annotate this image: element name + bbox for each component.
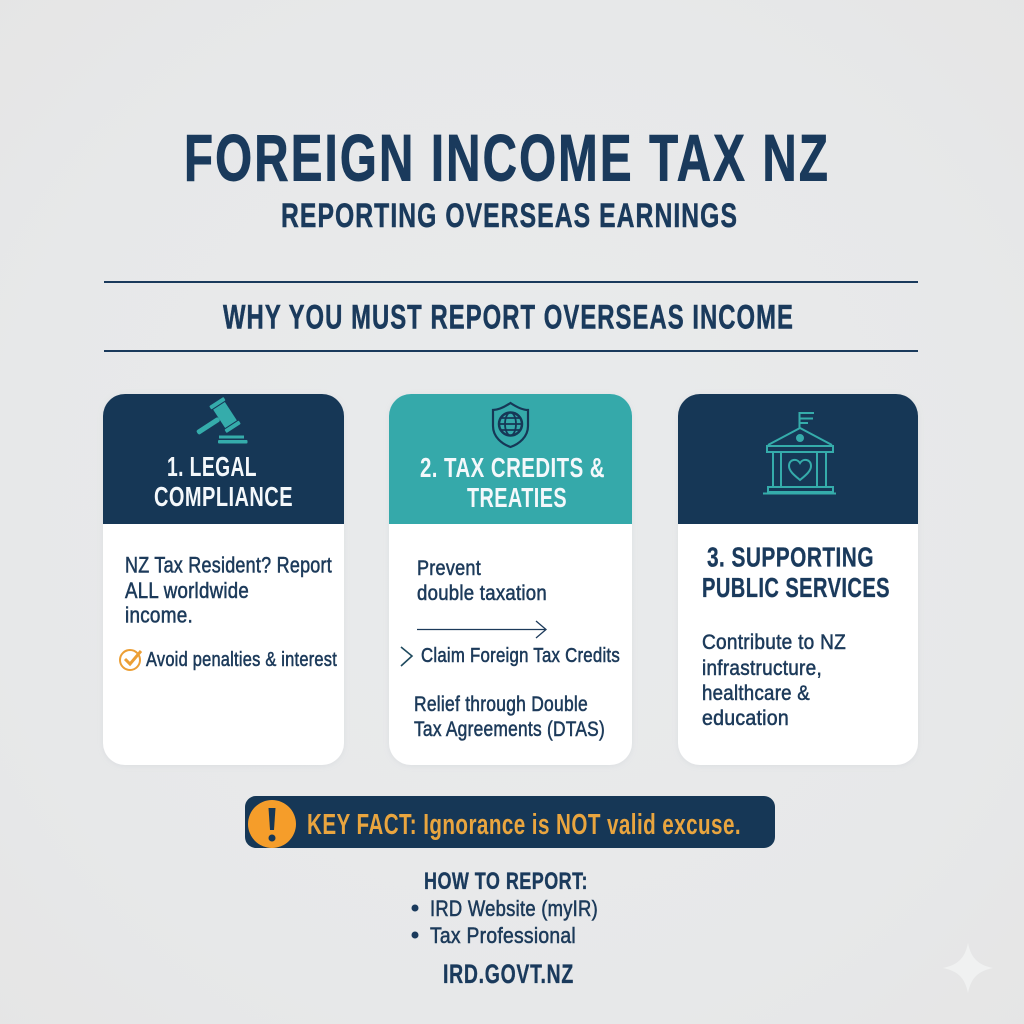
- card heading: legal compliance: COMPLIANCE: [154, 481, 293, 512]
- how to report list: IRD Website (myIR): [430, 896, 598, 921]
- card header: public services: [678, 394, 918, 524]
- card heading: legal compliance: 1. LEGAL: [167, 451, 257, 482]
- card heading: tax credits: [420, 452, 605, 513]
- card header: legal compliance: [103, 394, 344, 524]
- how to report heading: HOW TO REPORT:: [424, 868, 588, 895]
- body text: residency: NZ Tax Resident? Report: [125, 552, 332, 578]
- body text: residency: income.: [125, 602, 193, 628]
- checklist text: penalties: Avoid penalties & interest: [146, 649, 337, 671]
- text: double tax agreements: Tax Agreements (DTAS): [414, 718, 605, 741]
- card heading: public services: [702, 542, 890, 603]
- card heading: public services: 3. SUPPORTING: [707, 542, 874, 572]
- body text: contribution: education: [702, 706, 789, 730]
- panel: supporting public services: [678, 394, 918, 765]
- text: foreign tax credits: Claim Foreign Tax Credits: [421, 645, 620, 667]
- body text: residency: ALL worldwide: [125, 578, 249, 603]
- text: double tax agreements: Relief through Double: [414, 693, 588, 716]
- section heading: WHY YOU MUST REPORT OVERSEAS INCOME: [223, 298, 794, 336]
- arrow: [417, 621, 546, 638]
- body text: contribution: healthcare &: [702, 681, 810, 705]
- card heading: public services: PUBLIC SERVICES: [702, 572, 890, 603]
- body text: double taxation: Prevent: [417, 557, 481, 580]
- body text: double taxation: double taxation: [417, 582, 547, 605]
- icon: chevron: [401, 647, 412, 666]
- website: IRD.GOVT.NZ: [443, 959, 574, 989]
- card heading: legal compliance: [154, 451, 293, 512]
- panel: legal compliance: [103, 394, 344, 765]
- icon: sparkle: [943, 943, 993, 993]
- subtitle: REPORTING OVERSEAS EARNINGS: [281, 197, 738, 235]
- panel: tax credits and treaties: [389, 394, 632, 765]
- icon: shield with globe: [493, 403, 528, 447]
- card heading: tax credits: 2. TAX CREDITS &: [420, 452, 605, 483]
- text: double tax agreements: [414, 693, 605, 741]
- body text: residency: [125, 552, 332, 628]
- icon: civic building with heart: [763, 413, 836, 494]
- icon: check badge: [120, 650, 141, 670]
- body text: contribution: infrastructure,: [702, 656, 822, 680]
- icon: warning: [248, 800, 296, 848]
- card header: tax credits: [389, 394, 632, 524]
- body text: contribution: Contribute to NZ: [702, 630, 846, 654]
- card heading: tax credits: TREATIES: [467, 482, 567, 513]
- icon: gavel: [189, 397, 248, 446]
- how to report list: [412, 896, 598, 948]
- how to report list: Tax Professional: [430, 923, 576, 948]
- callout text: KEY FACT: Ignorance is NOT valid excuse.: [307, 809, 741, 841]
- callout: key fact: [245, 796, 775, 848]
- body text: double taxation: [417, 557, 547, 605]
- body text: contribution: [702, 630, 846, 730]
